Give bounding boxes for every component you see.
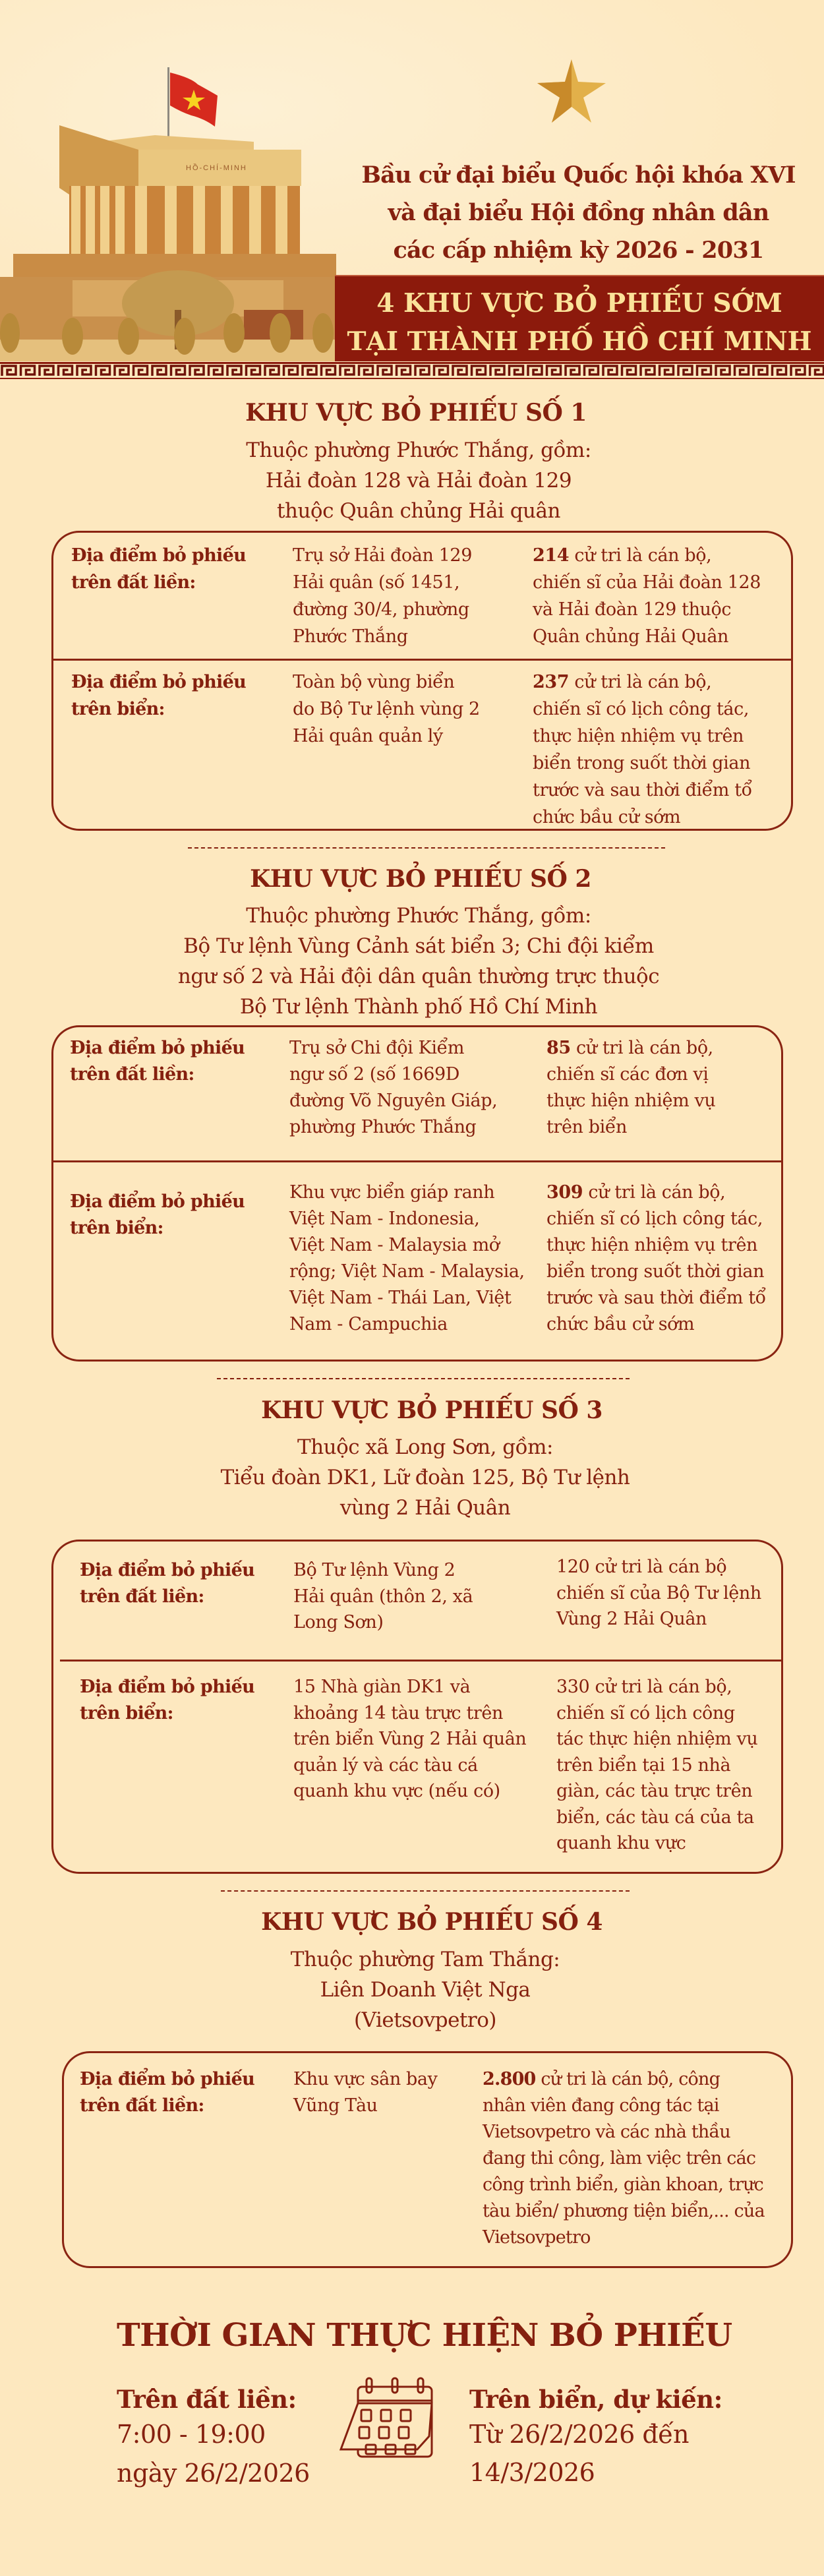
subtitle: khu vực 1: Hải đoàn 128 và Hải đoàn 129 <box>266 469 572 493</box>
row: land <box>70 1036 715 1137</box>
row: land: chiến sĩ các đơn vị <box>546 1064 709 1085</box>
row: land: 120 cử tri là cán bộ <box>556 1557 726 1577</box>
row: sea: rộng; Việt Nam - Malaysia, <box>289 1261 525 1282</box>
row: sea: biển trong suốt thời gian <box>533 753 750 773</box>
text block: trên biển <box>469 2385 722 2487</box>
icon: calendar <box>339 2378 433 2458</box>
row: land: tàu biển/ phương tiện biển,... của <box>483 2201 765 2221</box>
row: land: chiến sĩ của Bộ Tư lệnh <box>556 1582 761 1603</box>
subtitle: khu vực 1 <box>246 438 591 523</box>
row: land: thực hiện nhiệm vụ <box>546 1091 715 1111</box>
row: sea: quanh khu vực <box>556 1833 686 1853</box>
row: land: ngư số 2 (số 1669D <box>289 1064 459 1085</box>
row: land: Trụ sở Chi đội Kiểm <box>289 1038 464 1058</box>
text block: trên đất liền <box>117 2385 310 2488</box>
row: sea: biển trong suốt thời gian <box>546 1261 764 1282</box>
header background glow <box>0 0 824 361</box>
row: land: đường 30/4, phường <box>293 599 469 620</box>
row: sea: trên biển Vùng 2 Hải quân <box>293 1729 526 1749</box>
row: land <box>71 545 761 647</box>
subtitle: khu vực 3: Tiểu đoàn DK1, Lữ đoàn 125, Bộ Tư lệnh <box>221 1466 630 1489</box>
building <box>0 125 336 361</box>
row: sea: Địa điểm bỏ phiếu <box>71 672 246 692</box>
subtitle: khu vực 2: Bộ Tư lệnh Vùng Cảnh sát biển 3; Chi đội kiểm <box>183 934 654 958</box>
row: land: phường Phước Thắng <box>289 1117 476 1137</box>
row: sea: quản lý và các tàu cá <box>293 1755 478 1775</box>
row: sea: quanh khu vực (nếu có) <box>293 1781 500 1801</box>
row: sea: trên biển: <box>70 1218 163 1238</box>
row: land: Địa điểm bỏ phiếu <box>71 545 246 566</box>
row: land <box>80 2068 765 2248</box>
row: sea: Việt Nam - Malaysia mở <box>289 1235 500 1255</box>
row: land: Địa điểm bỏ phiếu <box>70 1038 245 1058</box>
banner: 4 khu vực: 4 KHU VỰC BỎ PHIẾU SỚM <box>376 288 782 318</box>
row: sea: trên biển: <box>71 699 165 719</box>
header title <box>361 161 796 264</box>
row: land: 85 cử tri là cán bộ, <box>546 1038 713 1058</box>
row: sea: chiến sĩ có lịch công tác, <box>546 1209 763 1229</box>
row: sea: giàn, các tàu trực trên <box>556 1781 752 1801</box>
banner: 4 khu vực: TẠI THÀNH PHỐ HỒ CHÍ MINH <box>347 326 812 357</box>
panel: khu vực 1 table <box>51 531 793 831</box>
subtitle: khu vực 3 <box>220 1435 630 1520</box>
row: land: Địa điểm bỏ phiếu <box>80 2069 254 2089</box>
building: HỒ-CHÍ-MINH <box>186 164 247 172</box>
heading: khu vực 2: KHU VỰC BỎ PHIẾU SỐ 2 <box>250 865 591 893</box>
row: land: Hải quân (thôn 2, xã <box>293 1586 473 1606</box>
row: land: trên đất liền: <box>80 2095 204 2116</box>
row: land: đang thi công, làm việc trên các <box>483 2148 755 2169</box>
row: sea: Địa điểm bỏ phiếu <box>70 1191 245 1212</box>
row: land: Bộ Tư lệnh Vùng 2 <box>293 1560 455 1580</box>
text block: trên biển: Trên biển, dự kiến: <box>469 2385 722 2414</box>
row: sea: 15 Nhà giàn DK1 và <box>293 1677 470 1697</box>
row: land: Khu vực sân bay <box>293 2069 437 2089</box>
header title: và đại biểu Hội đồng nhân dân <box>388 199 769 226</box>
subtitle: khu vực 4 <box>291 1948 560 2032</box>
heading: thời gian: THỜI GIAN THỰC HIỆN BỎ PHIẾU <box>117 2317 732 2354</box>
row: land: đường Võ Nguyên Giáp, <box>289 1091 497 1111</box>
row: sea: chức bầu cử sớm <box>533 807 680 827</box>
row: sea: biển, các tàu cá của ta <box>556 1807 754 1828</box>
header illustration: mausoleum <box>0 67 336 361</box>
row: land <box>80 1557 761 1632</box>
row: sea: Nam - Campuchia <box>289 1314 448 1334</box>
row: land: công trình biển, giàn khoan, trực <box>483 2174 763 2195</box>
banner: 4 khu vực <box>335 275 824 361</box>
row: sea: thực hiện nhiệm vụ trên <box>546 1235 757 1255</box>
header title: các cấp nhiệm kỳ 2026 - 2031 <box>394 237 763 264</box>
row: sea: 237 cử tri là cán bộ, <box>533 672 711 692</box>
subtitle: khu vực 1: thuộc Quân chủng Hải quân <box>277 499 560 523</box>
subtitle: khu vực 4: Liên Doanh Việt Nga <box>320 1978 530 2002</box>
row: sea: 330 cử tri là cán bộ, <box>556 1677 732 1697</box>
row: land: trên đất liền: <box>70 1064 194 1085</box>
row: sea: trước và sau thời điểm tổ <box>546 1288 766 1308</box>
row: sea: Toàn bộ vùng biển <box>293 672 454 692</box>
row: land: 2.800 cử tri là cán bộ, công <box>483 2069 720 2089</box>
row: land: Vietsovpetro <box>483 2227 591 2248</box>
panel: khu vực 3 table <box>51 1540 783 1874</box>
row: sea: Việt Nam - Indonesia, <box>289 1209 479 1229</box>
subtitle: khu vực 1: Thuộc phường Phước Thắng, gồm: <box>246 438 591 462</box>
icon: flag <box>167 67 218 137</box>
panel: khu vực 2 table <box>51 1025 783 1362</box>
icon: tree <box>0 270 334 355</box>
row: sea: thực hiện nhiệm vụ trên <box>533 726 744 746</box>
subtitle: khu vực 2 <box>178 904 659 1019</box>
row: sea: Việt Nam - Thái Lan, Việt <box>289 1288 511 1308</box>
text block: trên biển: 14/3/2026 <box>469 2458 595 2487</box>
header title: Bầu cử đại biểu Quốc hội khóa XVI <box>361 162 796 189</box>
row: sea: chiến sĩ có lịch công <box>556 1702 735 1723</box>
row: land: Vietsovpetro và các nhà thầu <box>483 2122 730 2142</box>
subtitle: khu vực 4: (Vietsovpetro) <box>354 2008 496 2032</box>
row: sea <box>80 1676 757 1853</box>
row: sea <box>70 1182 766 1334</box>
row: sea: khoảng 14 tàu trực trên <box>293 1702 503 1723</box>
heading: khu vực 1: KHU VỰC BỎ PHIẾU SỐ 1 <box>245 399 587 427</box>
row: land: Địa điểm bỏ phiếu <box>80 1560 254 1580</box>
row: land: Trụ sở Hải đoàn 129 <box>293 545 472 566</box>
row: sea: do Bộ Tư lệnh vùng 2 <box>293 699 480 719</box>
row: land: Quân chủng Hải Quân <box>533 626 728 647</box>
text block: trên đất liền: ngày 26/2/2026 <box>117 2459 310 2488</box>
row: land: trên biển <box>546 1117 627 1137</box>
row: land: và Hải đoàn 129 thuộc <box>533 599 731 620</box>
text block: trên biển: Từ 26/2/2026 đến <box>469 2420 689 2449</box>
row: land: Vũng Tàu <box>293 2095 378 2116</box>
subtitle: khu vực 2: Bộ Tư lệnh Thành phố Hồ Chí Minh <box>240 995 597 1019</box>
row: sea: Hải quân quản lý <box>293 726 443 746</box>
icon: gold star <box>537 59 606 123</box>
row: sea: tác thực hiện nhiệm vụ <box>556 1729 757 1749</box>
row: land: Hải quân (số 1451, <box>293 572 459 593</box>
text block: trên đất liền: Trên đất liền: <box>117 2385 297 2414</box>
row: land: trên đất liền: <box>71 572 196 593</box>
row: sea: chức bầu cử sớm <box>546 1314 694 1334</box>
row: sea: Khu vực biển giáp ranh <box>289 1182 494 1203</box>
row: land: Long Sơn) <box>293 1612 384 1632</box>
row: land: trên đất liền: <box>80 1586 204 1606</box>
greek key border <box>0 362 824 379</box>
row: sea: 309 cử tri là cán bộ, <box>546 1182 725 1203</box>
heading: khu vực 4: KHU VỰC BỎ PHIẾU SỐ 4 <box>261 1908 603 1936</box>
row: sea: chiến sĩ có lịch công tác, <box>533 699 749 719</box>
row: sea <box>71 671 752 827</box>
heading: khu vực 3: KHU VỰC BỎ PHIẾU SỐ 3 <box>261 1396 603 1424</box>
row: sea: Địa điểm bỏ phiếu <box>80 1677 254 1697</box>
row: sea: trên biển tại 15 nhà <box>556 1755 730 1775</box>
row: land: Phước Thắng <box>293 626 408 647</box>
row: land: 214 cử tri là cán bộ, <box>533 545 711 566</box>
subtitle: khu vực 4: Thuộc phường Tam Thắng: <box>291 1948 560 1971</box>
subtitle: khu vực 2: ngư số 2 và Hải đội dân quân thường trực thuộc <box>178 965 659 988</box>
row: land: nhân viên đang công tác tại <box>483 2095 719 2116</box>
row: sea: trước và sau thời điểm tổ <box>533 780 752 800</box>
subtitle: khu vực 2: Thuộc phường Phước Thắng, gồm: <box>246 904 591 928</box>
subtitle: khu vực 3: vùng 2 Hải Quân <box>340 1496 510 1520</box>
subtitle: khu vực 3: Thuộc xã Long Sơn, gồm: <box>297 1435 553 1459</box>
text block: trên đất liền: 7:00 - 19:00 <box>117 2420 266 2449</box>
row: land: Vùng 2 Hải Quân <box>556 1609 707 1629</box>
row: sea: trên biển: <box>80 1702 173 1723</box>
panel: khu vực 4 table <box>62 2051 793 2268</box>
row: land: chiến sĩ của Hải đoàn 128 <box>533 572 761 593</box>
